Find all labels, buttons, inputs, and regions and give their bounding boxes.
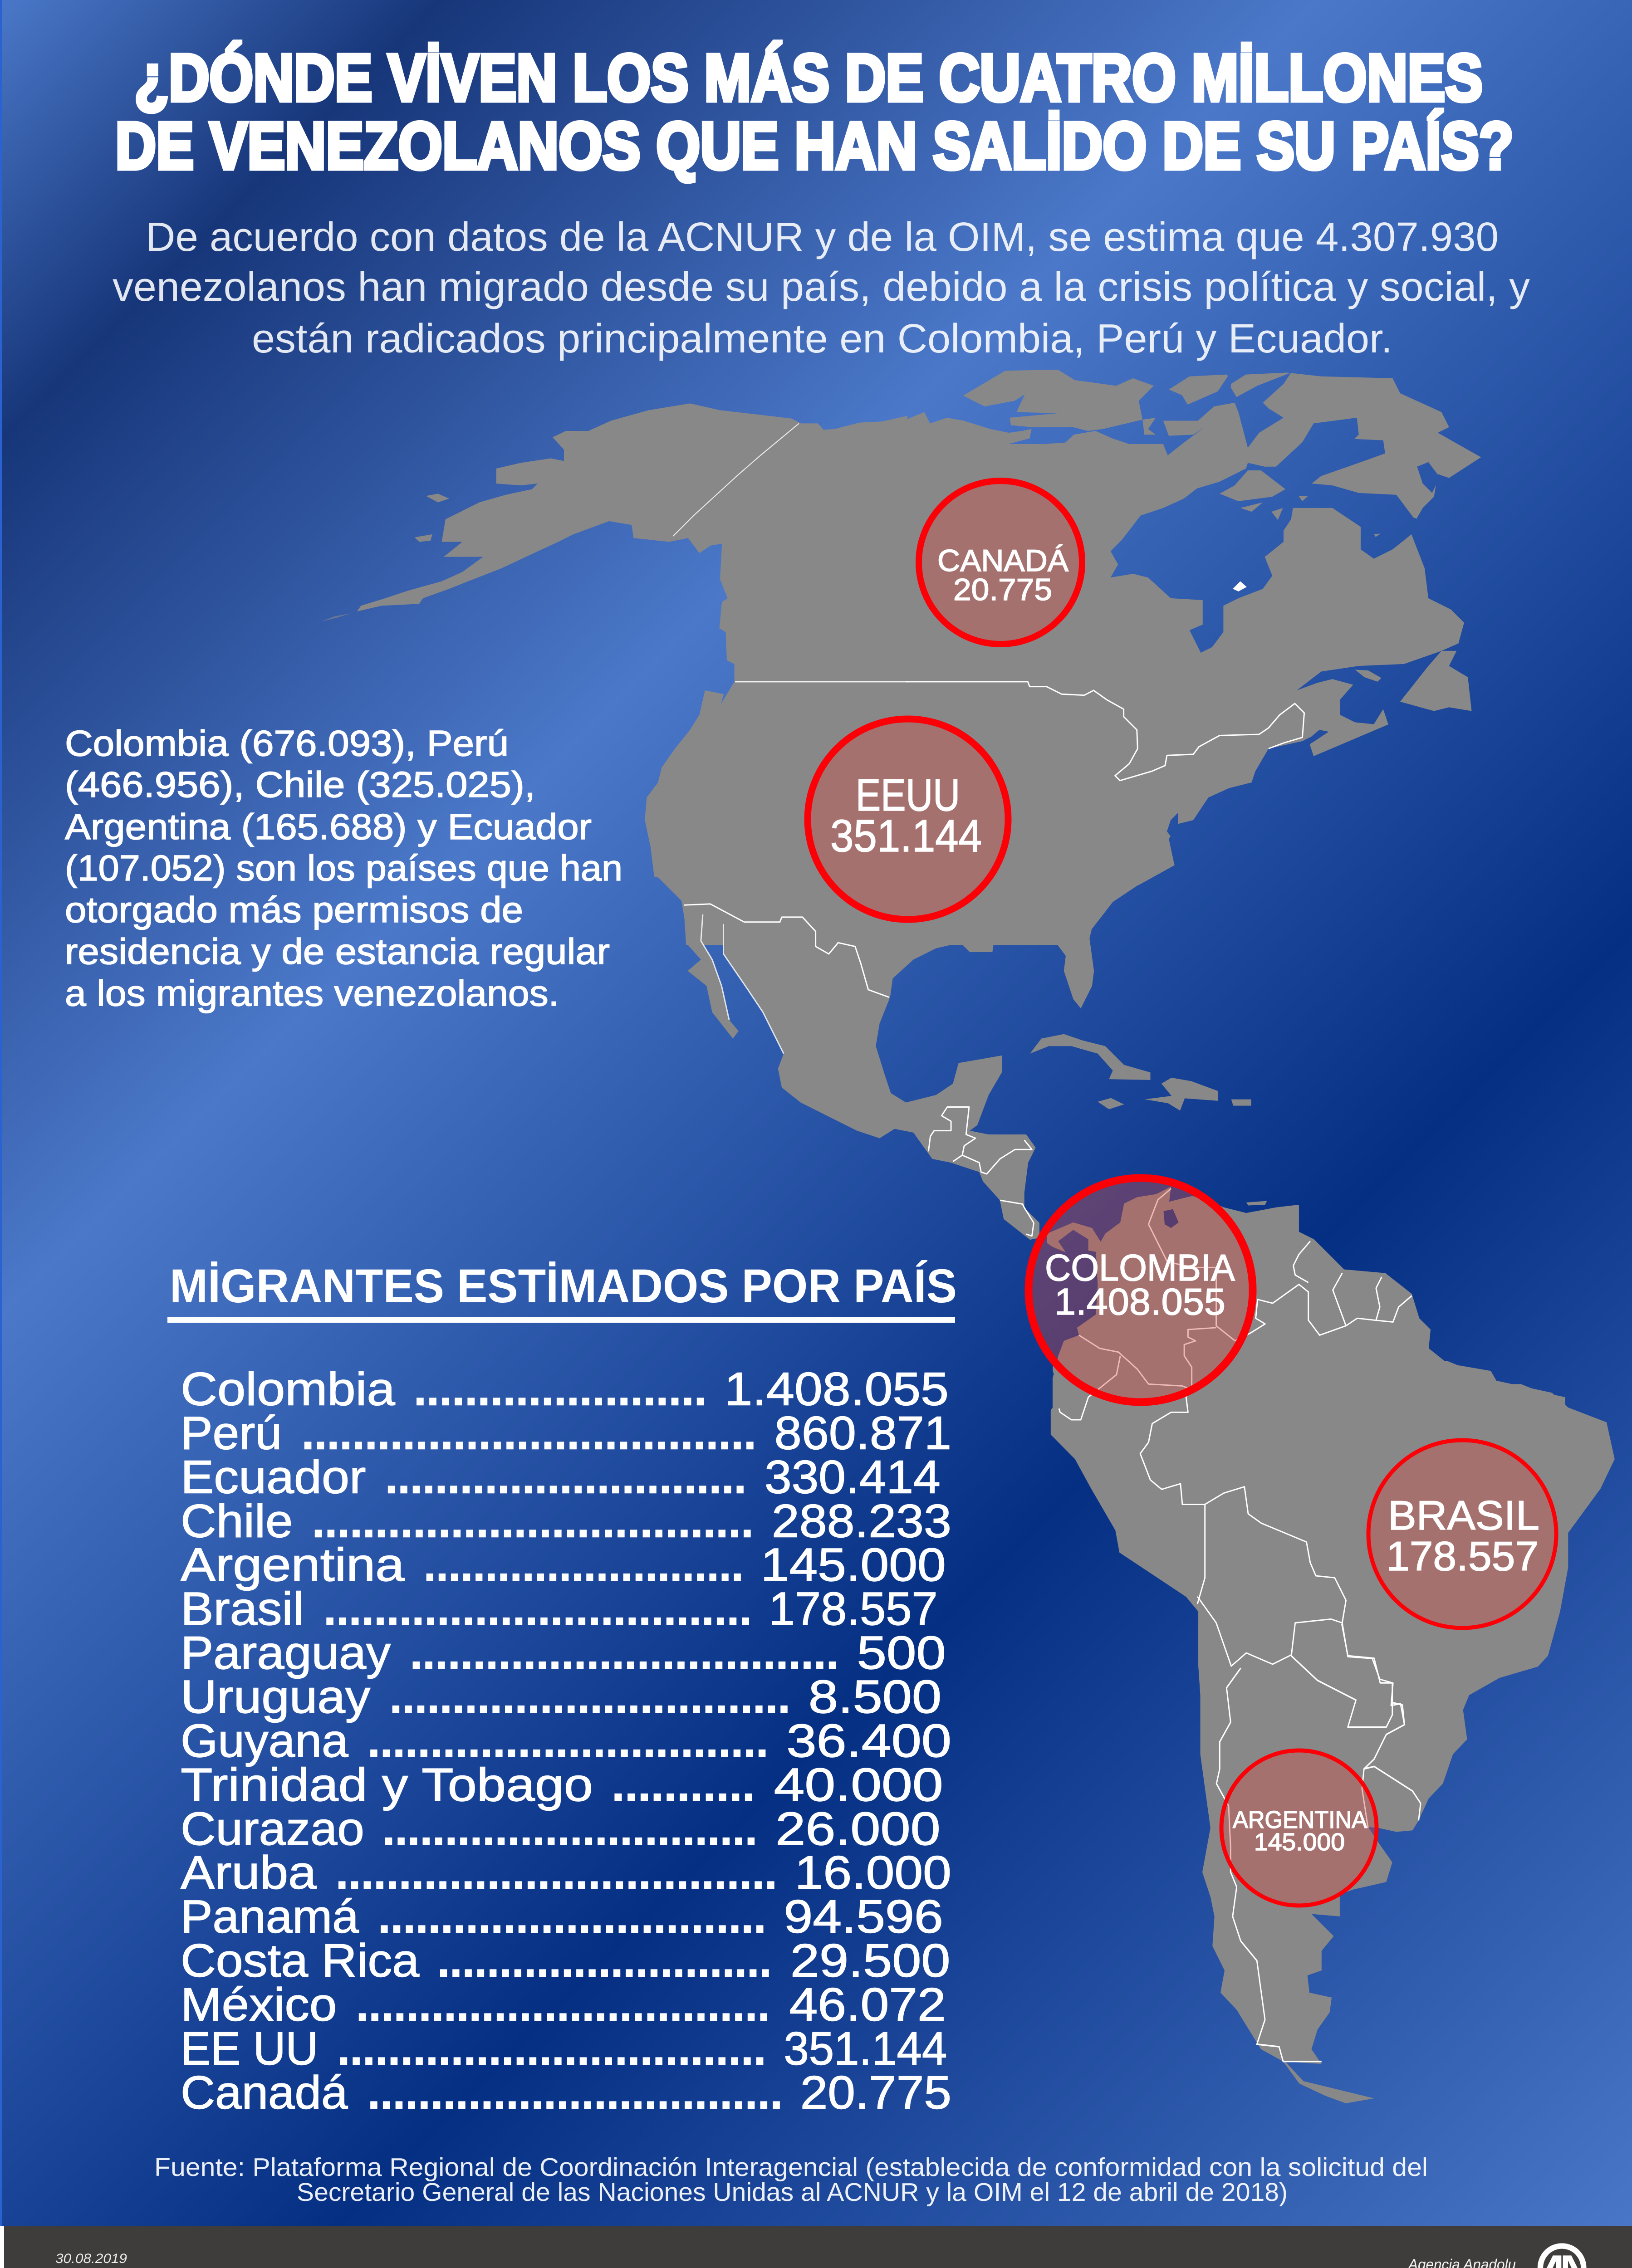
intro text [113,215,1530,362]
bubble: Colombia: COLOMBIA [1045,1246,1235,1289]
intro text: De acuerdo con datos de la ACNUR y de la OIM, se estima que 4.307.930 [146,215,1499,260]
residence permits text block: Colombia (676.093), Perú [65,723,509,763]
residence permits text block: otorgado más permisos de [65,890,523,930]
borders: Alaska and Canada [673,423,909,682]
table heading: MİGRANTES ESTİMADOS POR PAÍS [170,1260,957,1313]
bubble: Colombia: 1.408.055 [1054,1281,1225,1323]
residence permits text block: (466.956), Chile (325.025), [65,764,535,805]
table: migrants by country: ........... [612,1759,755,1811]
table: migrants by country: 94.596 [784,1891,943,1943]
land: Caribbean islands [1145,1078,1251,1110]
table: migrants by country: ................................. [368,2066,783,2118]
title [115,41,1514,183]
footer bar [0,2226,1632,2268]
table: migrants by country: Ecuador [181,1451,366,1503]
table: migrants by country: ................................ [390,1671,790,1723]
icon: Anadolu Agency logo [1539,2246,1585,2268]
table: migrants by country: ............................. [385,1451,746,1503]
table: migrants by country: 40.000 [774,1759,943,1811]
table: migrants by country: ................................. [356,1979,770,2031]
table: migrants by country: Paraguay [181,1627,391,1679]
table: migrants by country: Curazao [181,1803,364,1855]
land: southern South America [1051,1361,1615,2103]
table: migrants by country: 145.000 [761,1539,946,1591]
table: migrants by country: Aruba [181,1847,317,1899]
table: migrants by country: Uruguay [181,1671,371,1723]
table: migrants by country: ................................... [336,1847,777,1899]
table: migrants by country: ................................ [368,1715,768,1767]
table: migrants by country: Panamá [181,1891,359,1943]
borders: southern South America [1216,1624,1421,2062]
table: migrants by country: Brasil [181,1583,304,1635]
borders: United States and Canada [906,682,1304,781]
table: migrants by country: 20.775 [800,2066,951,2118]
residence permits text block: (107.052) son los países que han [65,848,622,888]
land: Canadian islands [1163,421,1382,682]
bubble: Brasil [1368,1440,1556,1628]
borders: northern South America [1059,1188,1412,1724]
table: migrants by country: .............................. [382,1803,757,1855]
table: migrants by country: Argentina [181,1539,405,1591]
table: migrants by country: .......................... [424,1539,744,1591]
land: northern South America [1047,1187,1565,1420]
table: migrants by country: Canadá [181,2066,348,2118]
residence permits text block [65,723,622,1013]
table: migrants by country: 1.408.055 [725,1363,949,1415]
table: migrants by country: ....................... [414,1363,707,1415]
bubble: Argentina: 145.000 [1254,1828,1345,1856]
table: migrants by country: 288.233 [772,1495,951,1547]
bubble: Canadá: 20.775 [953,572,1052,607]
table: migrants by country: Guyana [181,1715,348,1767]
table: migrants by country: 36.400 [786,1715,951,1767]
bubble: EEUU: 351.144 [830,811,982,861]
table: migrants by country: Trinidad y Tobago [181,1759,593,1811]
table: migrants by country: 351.144 [784,2022,947,2074]
left edge highlight [0,0,2,2226]
bubble: EEUU: EEUU [856,770,960,821]
bubble: Brasil: 178.557 [1386,1534,1539,1579]
bubble: EEUU [808,719,1008,919]
source note [154,2153,1428,2207]
table: migrants by country: Colombia [181,1363,395,1415]
source note: Secretario General de las Naciones Unidas al ACNUR y la OIM el 12 de abril de 2018) [297,2178,1288,2207]
intro text: están radicados principalmente en Colombia, Perú y Ecuador. [252,316,1392,362]
table: migrants by country: ............................... [378,1891,766,1943]
land: Alaska, western Canada and western United States [321,403,909,945]
table: migrants by country: 500 [857,1627,946,1679]
table: migrants by country: .................................. [323,1583,752,1635]
source note: Fuente: Plataforma Regional de Coordinación Interagencial (establecida de conformidad con la solicitud del [154,2153,1428,2182]
table: migrants by country: 330.414 [765,1451,941,1503]
table: migrants by country: EE UU [181,2022,318,2074]
bubble: Canadá [919,481,1082,644]
bubble: Canadá: CANADÁ [937,543,1069,578]
table: migrants by country [181,1363,951,2118]
map: the Americas [321,370,1615,2103]
table: migrants by country: 26.000 [775,1803,941,1855]
table: migrants by country: .................................. [337,2022,766,2074]
table: migrants by country: 8.500 [809,1671,941,1723]
table: migrants by country: .................................. [410,1627,839,1679]
bubble: Brasil: BRASIL [1388,1493,1539,1539]
table: migrants by country: Costa Rica [181,1935,420,1987]
table: migrants by country: .................................... [302,1407,756,1459]
residence permits text block: a los migrantes venezolanos. [65,973,559,1013]
borders: Mexico and Central America [684,904,1034,1236]
table: migrants by country: ................................... [312,1495,754,1547]
bubble: Argentina: ARGENTINA [1233,1806,1367,1833]
table: migrants by country: México [181,1979,337,2031]
bubble: Argentina [1221,1750,1377,1906]
intro text: venezolanos han migrado desde su país, debido a la crisis política y social, y [113,264,1530,310]
table: migrants by country: 29.500 [790,1935,951,1987]
table: migrants by country: Perú [181,1407,282,1459]
table: migrants by country: 860.871 [774,1407,951,1459]
date: 30.08.2019 [55,2251,127,2266]
table: migrants by country: 46.072 [789,1979,946,2031]
residence permits text block: residencia y de estancia regular [65,931,610,972]
table: migrants by country: ........................... [437,1935,772,1987]
table: migrants by country: Chile [181,1495,293,1547]
table: migrants by country: 16.000 [795,1847,951,1899]
bubble: Colombia [1029,1178,1253,1402]
land: Mexico, Central America and Gulf coast [654,860,1173,1240]
residence permits text block: Argentina (165.688) y Ecuador [65,807,592,847]
land: eastern Canada and eastern United States [906,370,1481,945]
table: migrants by country: 178.557 [769,1583,938,1635]
